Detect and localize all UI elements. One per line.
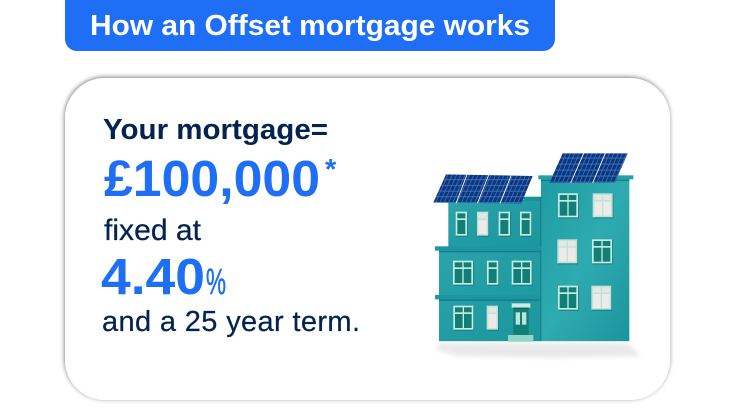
amount: £100,000: £100,000 (104, 150, 320, 207)
solar panels: right roof (549, 153, 628, 183)
rate: 4.40%: 4.40 (101, 248, 205, 305)
right wing (538, 175, 633, 341)
footnote asterisk: * (325, 154, 337, 186)
text: fixed at: fixed at (104, 214, 202, 247)
title text: How an Offset mortgage works (90, 10, 530, 42)
solar panels: left roof (433, 174, 533, 203)
ground shadow (437, 343, 640, 358)
left wing (435, 197, 541, 341)
panel: mortgage summary card (65, 78, 670, 400)
title banner (65, 0, 555, 51)
icon: apartment building with solar panels (433, 153, 640, 358)
front door (508, 303, 533, 342)
base line (439, 341, 629, 342)
heading: your mortgage: Your mortgage= (103, 114, 328, 146)
windows (453, 193, 613, 331)
rate: 4.40%: % (206, 261, 226, 302)
text: term: and a 25 year term. (102, 306, 360, 338)
